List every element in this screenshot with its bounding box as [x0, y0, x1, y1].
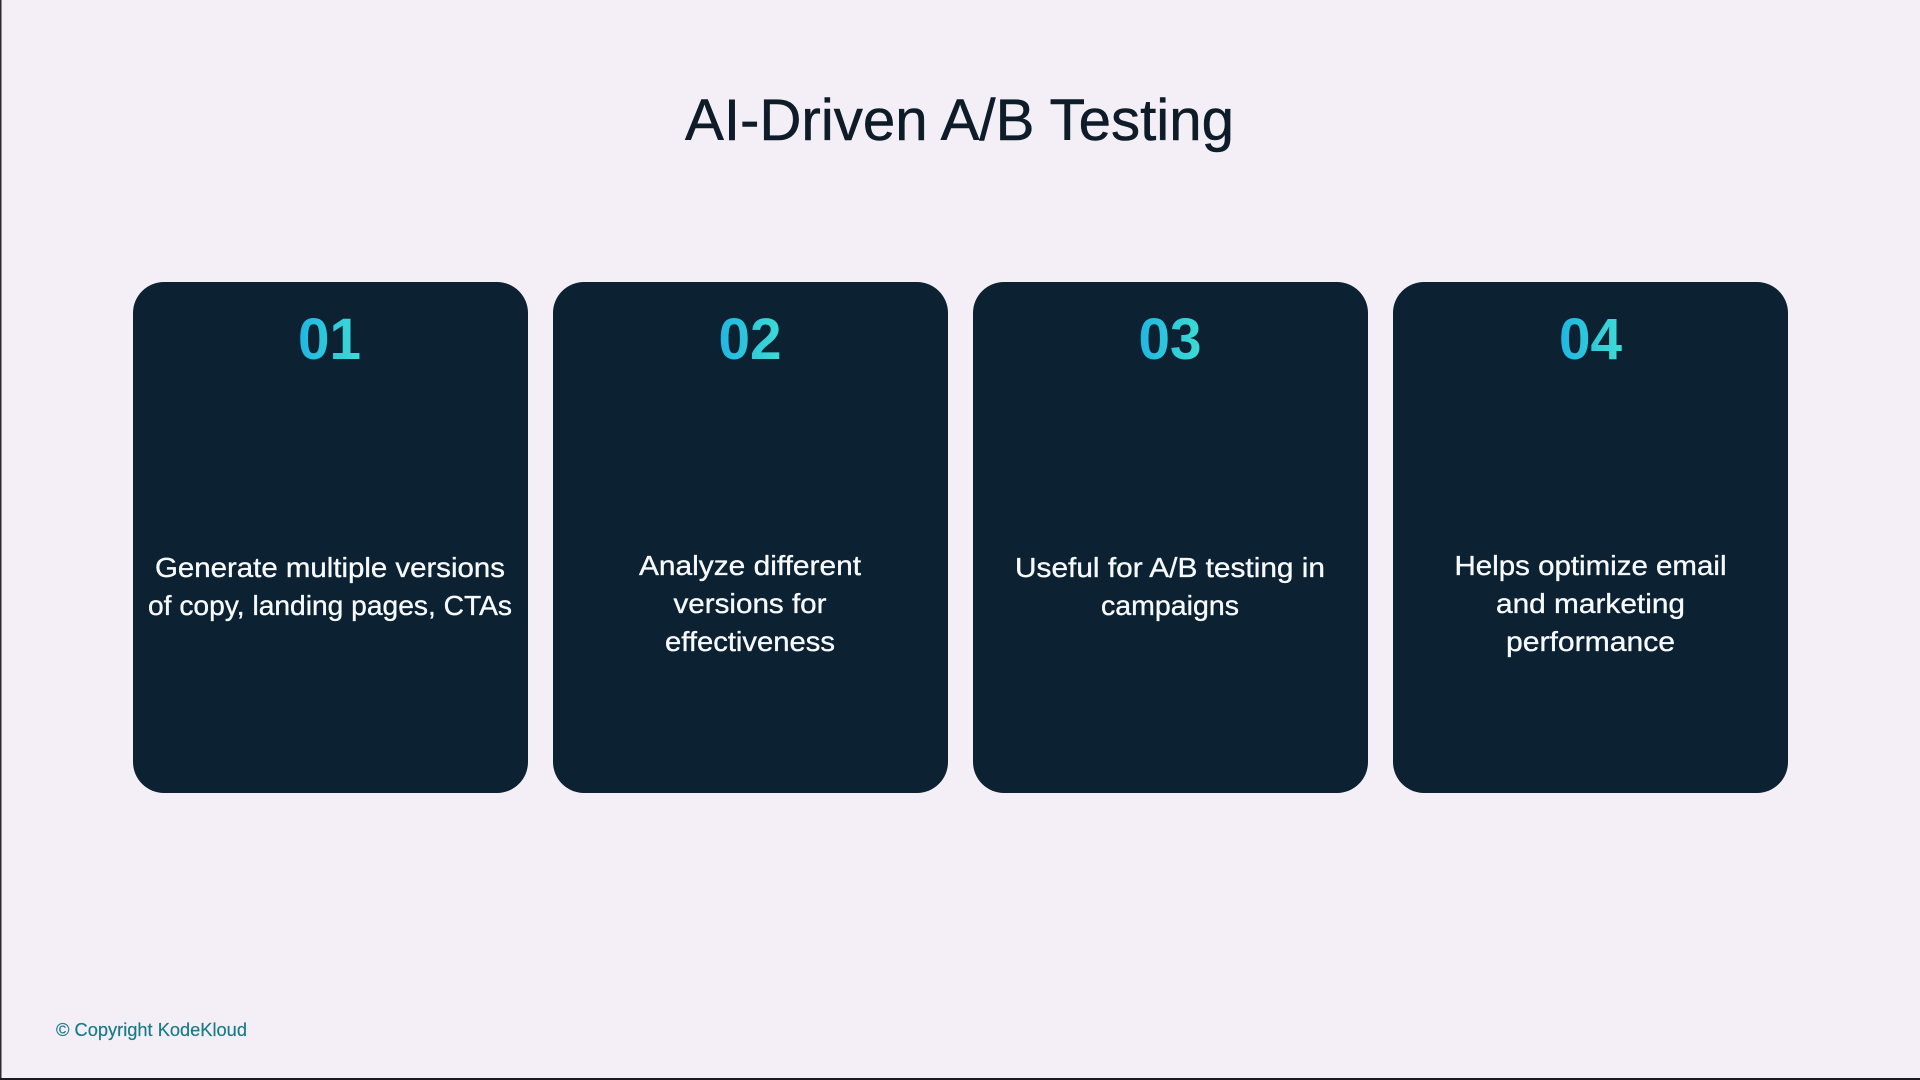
text: card 02 description: effectiveness — [665, 626, 835, 657]
text: card 01 description: Generate multiple versions — [155, 552, 505, 583]
text: card 03 description: campaigns — [1101, 590, 1239, 621]
text: card 04 description: performance — [1506, 626, 1675, 657]
text: card 02 description — [639, 550, 861, 657]
text: card 01 description — [148, 552, 512, 621]
title: AI-Driven A/B Testing — [685, 88, 1234, 153]
footer copyright: © Copyright KodeKloud — [56, 1020, 247, 1040]
number 01: 01 — [298, 307, 361, 372]
panel: card 04 — [1393, 282, 1788, 793]
text: card 01 description: of copy, landing pages, CTAs — [148, 590, 512, 621]
text: card 04 description: Helps optimize email — [1454, 550, 1726, 581]
number 03: 03 — [1138, 307, 1202, 372]
text: card 03 description — [1015, 552, 1325, 621]
text: card 02 description: Analyze different — [639, 550, 861, 581]
panel: card 02 — [553, 282, 948, 793]
number 02: 02 — [718, 307, 782, 372]
text: card 04 description — [1454, 550, 1726, 657]
number 04: 04 — [1559, 307, 1622, 372]
panel: card 03 — [973, 282, 1368, 793]
text: card 02 description: versions for — [674, 588, 826, 619]
text: card 04 description: and marketing — [1496, 588, 1685, 619]
panel: card 01 — [133, 282, 528, 793]
text: card 03 description: Useful for A/B testing in — [1015, 552, 1325, 583]
